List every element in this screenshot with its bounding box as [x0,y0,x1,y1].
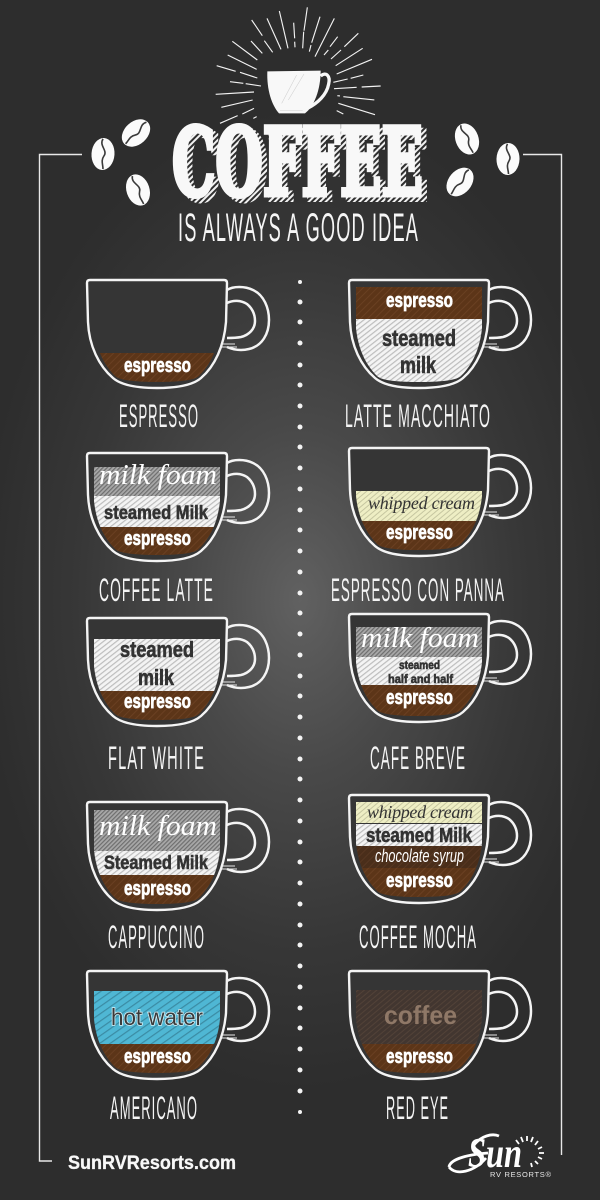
layer text: steamed milk: steamed Milk [366,825,473,847]
cup: Espresso [87,280,269,388]
layers [94,991,220,1073]
title: COFFEE [172,108,428,222]
layer text: espresso: espresso [386,687,453,709]
layer: espresso [100,353,214,382]
layer text: steamed milk: steamed Milk [104,503,208,524]
layers [94,639,220,720]
layer text: milk: milk [400,352,436,378]
layer text: espresso: espresso [386,290,453,312]
layer text: milk foam: milk foam [99,811,217,842]
layers [356,491,482,550]
layer text: coffee: coffee [384,1000,457,1030]
coffee beans right [441,120,520,202]
coffee beans left [90,114,156,209]
text: FLAT WHITE [108,740,205,776]
text: ESPRESSO [119,398,199,434]
layer text: espresso: espresso [124,528,191,550]
layer text: steamed: steamed [382,325,456,351]
layer text: milk foam: milk foam [361,623,479,654]
layer text: espresso: espresso [386,522,453,544]
layer text: espresso: espresso [124,355,191,377]
small coffee cup icon [267,71,329,113]
layer text: espresso: espresso [386,870,453,892]
text: COFFEE LATTE [99,572,214,608]
cup: Americano [87,971,269,1079]
logo wordmark: Sun [468,1131,522,1177]
layer text: half and half: half and half [388,672,454,686]
layer text: steamed: steamed [120,637,194,662]
cup: Espresso Con Panna [349,448,531,556]
logo subtext: RV RESORTS® [490,1170,551,1179]
rays [216,7,381,123]
layers [94,467,220,555]
layer text: steamed: steamed [399,658,440,672]
layers [356,990,482,1073]
layer text: milk foam: milk foam [99,460,217,491]
layers [356,627,482,716]
text: RED EYE [386,1090,449,1126]
cup: Cappuccino [87,802,269,910]
logo sun rays [516,1136,544,1167]
cup: Coffee Latte [87,453,269,561]
layer text: espresso: espresso [124,691,191,713]
layer text: whipped cream: whipped cream [368,493,475,513]
layer text: espresso: espresso [386,1046,453,1068]
layers [356,287,482,382]
footer website: SunRVResorts.com [68,1153,236,1174]
title: COFFEE: COFFEE [177,112,428,222]
layer text: espresso: espresso [124,878,191,900]
layer text: steamed milk: Steamed Milk [104,853,208,874]
layers [356,802,482,897]
cup: Red Eye [349,971,531,1079]
layers [94,810,220,904]
text: CAPPUCCINO [108,919,205,955]
layer text: chocolate syrup: chocolate syrup [375,846,464,866]
cup: Cafe Breve [349,614,531,722]
cup: Latte Macchiato [349,280,531,388]
text: CAFE BREVE [370,740,466,776]
cup: Flat White [87,618,269,726]
layer text: whipped cream: whipped cream [367,802,473,822]
layer text: milk: milk [138,665,175,690]
text: AMERICANO [110,1090,198,1126]
dotted center divider [298,280,302,1114]
layer text: hot water: hot water [111,1004,203,1030]
cup: Coffee Mocha [349,795,531,903]
frame border [40,154,562,1161]
header illustration: cup with rays [216,7,381,123]
layer text: espresso: espresso [124,1046,191,1068]
title: COFFEE: COFFEE [172,108,423,218]
logo: Sun RV Resorts [449,1131,551,1179]
